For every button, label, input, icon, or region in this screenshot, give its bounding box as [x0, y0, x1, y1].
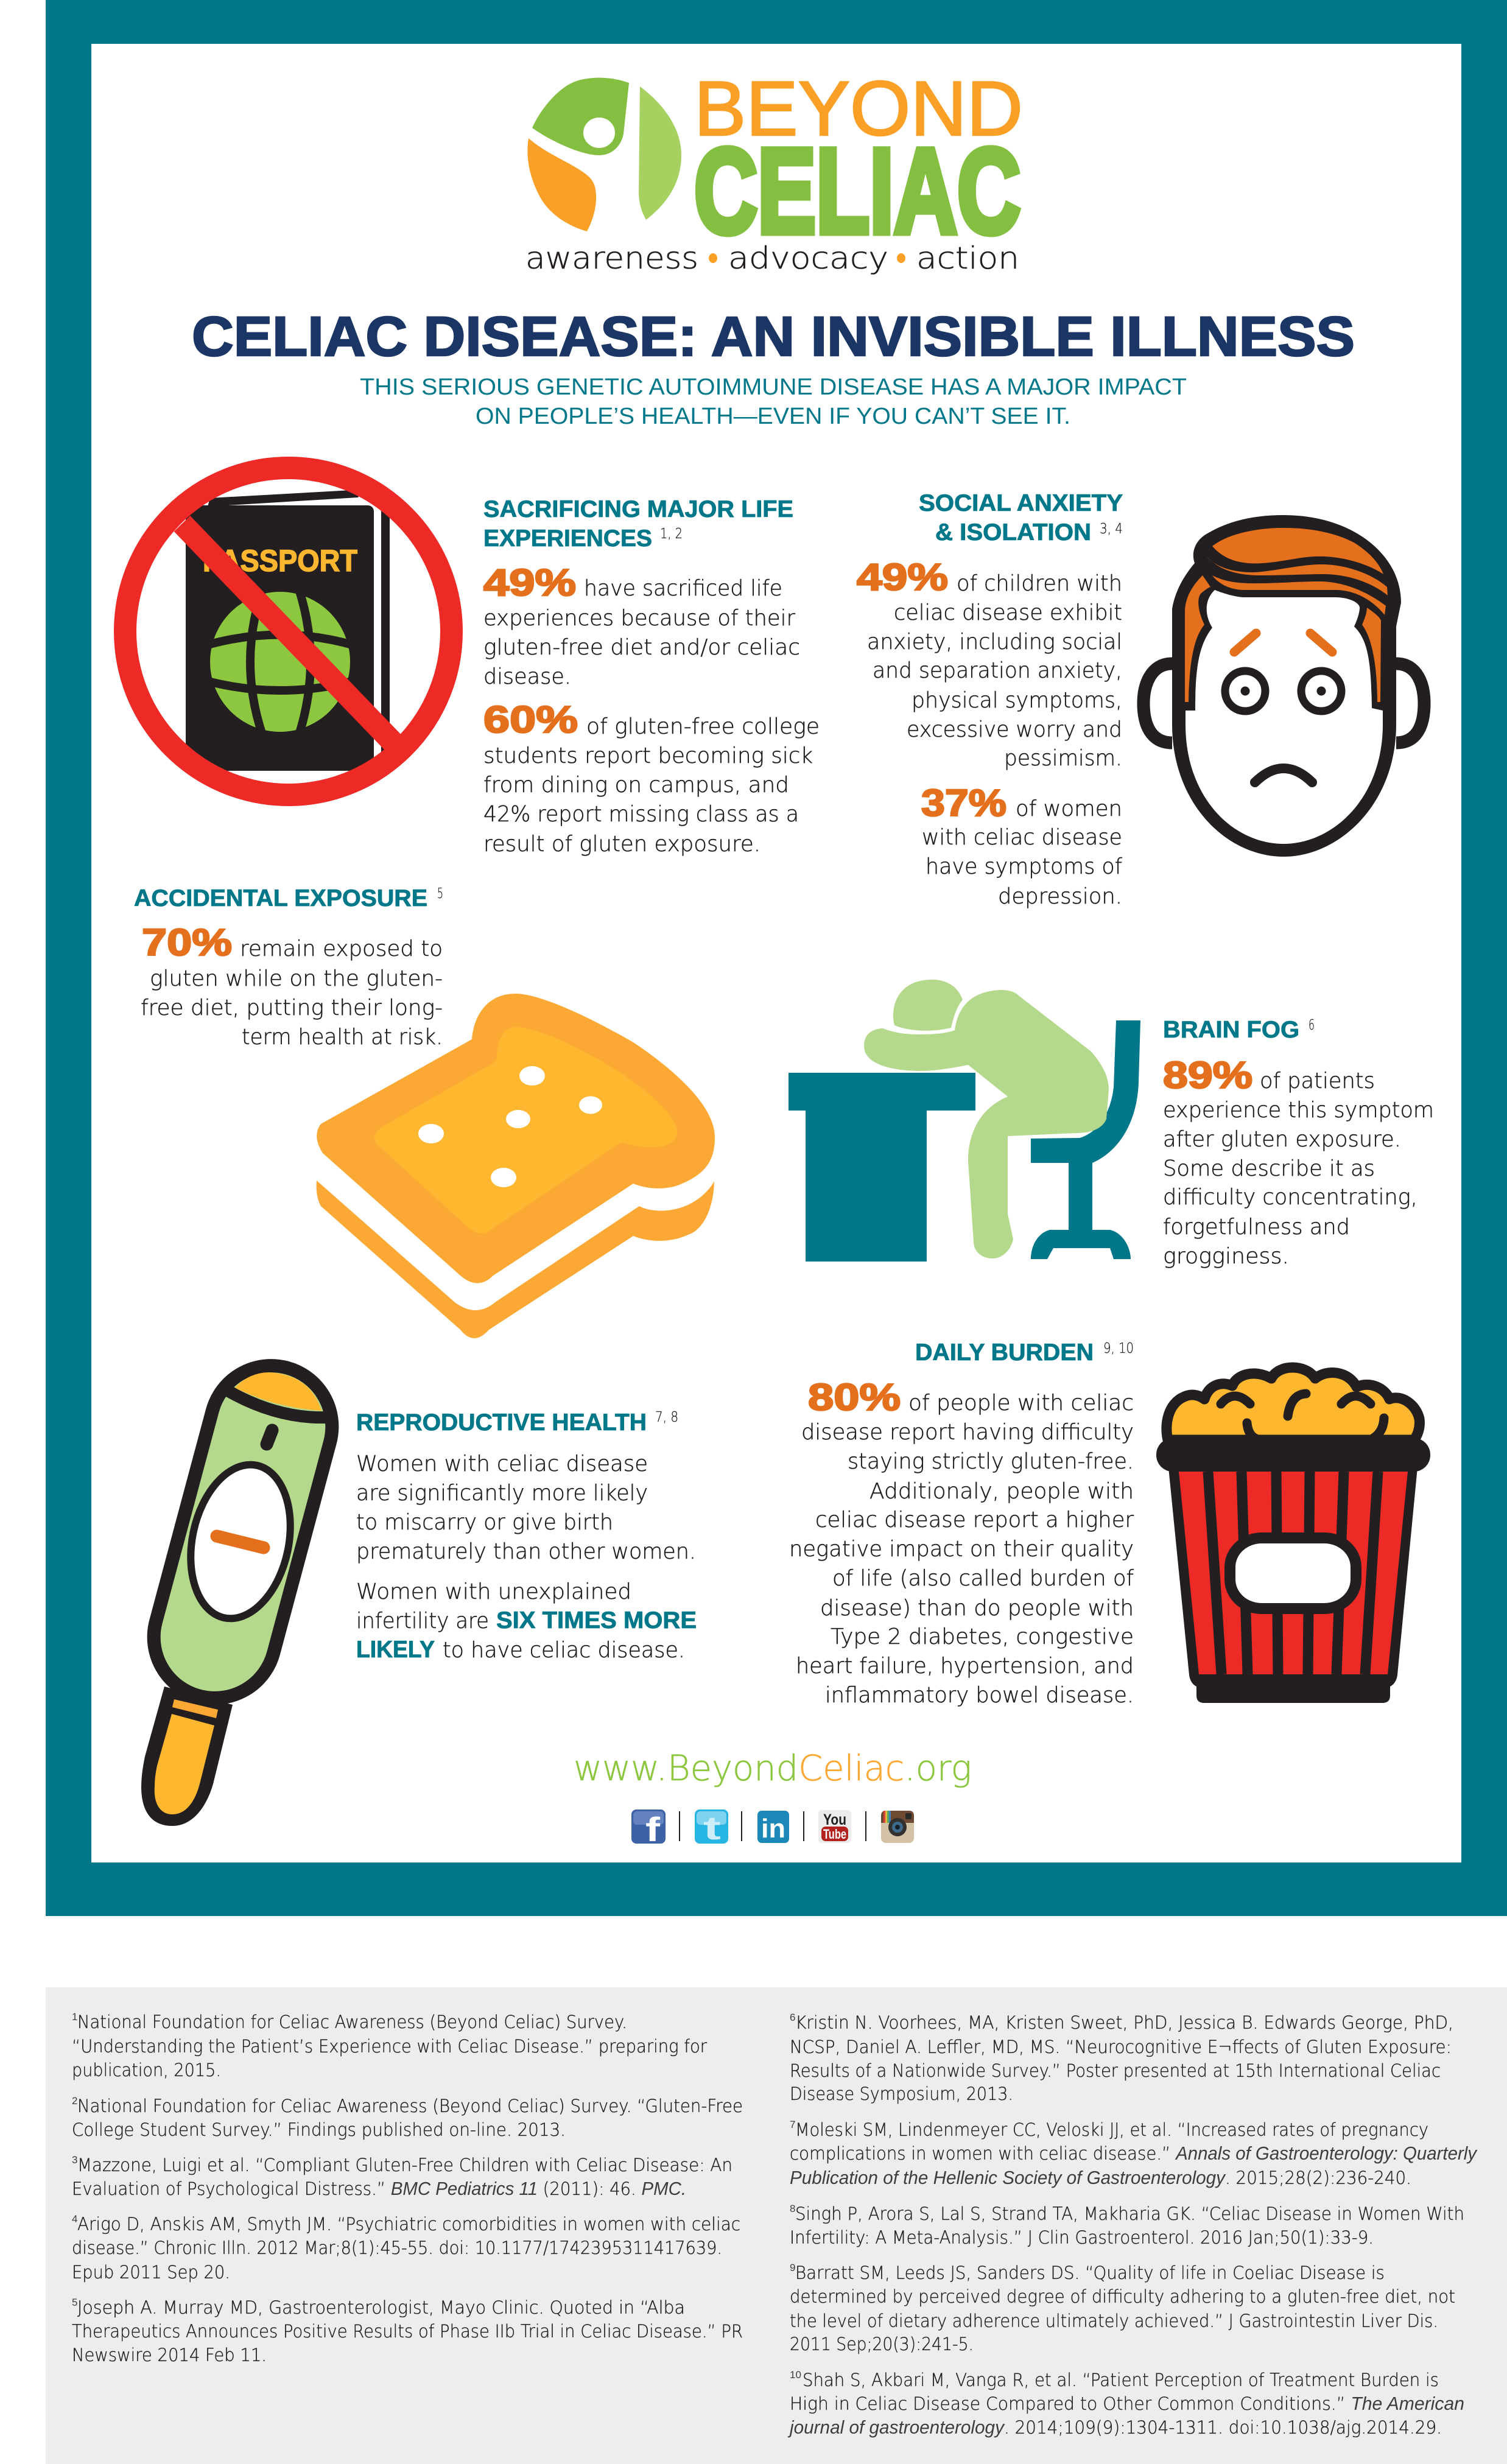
top cap — [235, 1372, 321, 1411]
heading: REPRODUCTIVE HEALTH — [356, 1409, 647, 1436]
stat: 37 percent of women: 37% — [921, 782, 1006, 824]
references right column — [787, 2012, 1478, 2438]
heading — [483, 496, 793, 552]
references right column: 8 — [790, 2203, 795, 2214]
stat: 80 percent: of people with celiac — [908, 1391, 1134, 1416]
logo wordmark — [694, 65, 1023, 258]
stat: 80 percent: staying strictly gluten-free. — [848, 1449, 1134, 1474]
references right column: determined by perceived degree of difficulty adhering to a gluten-free diet, not — [790, 2286, 1455, 2307]
stat: 60 percent: of gluten-free college — [586, 714, 820, 739]
references right column: 6 — [790, 2012, 795, 2023]
icon: youtube — [818, 1810, 851, 1843]
references left column: Therapeutics Announces Positive Results of Phase IIb Trial in Celiac Disease.” PR — [72, 2321, 743, 2342]
stat: 89 percent: forgetfulness and — [1163, 1215, 1350, 1240]
stat: 80 percent: negative impact on their quality — [789, 1537, 1134, 1562]
stat: 70 percent: remain exposed to — [240, 936, 443, 961]
references left column: 2 — [72, 2095, 77, 2107]
stat: 89 percent: Some describe it as — [1163, 1156, 1375, 1181]
references left column: disease.” Chronic Illn. 2012 Mar;8(1):45-55. doi: 10.1177/1742395311417639. — [72, 2238, 722, 2258]
popcorn — [1167, 1367, 1419, 1440]
panel: references — [46, 1987, 1507, 2464]
references left column: Joseph A. Murray MD, Gastroenterologist, Mayo Clinic. Quoted in “Alba — [77, 2297, 685, 2318]
text block: to miscarry or give birth — [356, 1510, 613, 1535]
stat: 60 percent: from dining on campus, and — [483, 773, 789, 798]
heading: SOCIAL ANXIETY — [919, 490, 1123, 516]
references right column: High in Celiac Disease Compared to Other Common Conditions.” The American — [790, 2393, 1464, 2414]
references left column: Newswire 2014 Feb 11. — [72, 2345, 267, 2365]
stat: 37 percent of women: depression. — [998, 884, 1122, 909]
stat: 49 percent: experiences because of their — [483, 606, 795, 631]
text block: six times more likely — [356, 1579, 697, 1663]
heading — [919, 490, 1123, 546]
references right column: Publication of the Hellenic Society of Gastroenterology. 2015;28(2):236-240. — [790, 2167, 1411, 2188]
references right column: the level of dietary adherence ultimately achieved.” J Gastrointestin Liver Dis. — [790, 2311, 1438, 2331]
text block — [356, 1451, 696, 1564]
stat: 80 percent: Type 2 diabetes, congestive — [831, 1624, 1134, 1649]
desk — [789, 1073, 975, 1262]
icon: linkedin — [757, 1811, 789, 1844]
text block: six times more likely: LIKELY — [356, 1637, 435, 1663]
heading: 6 — [1309, 1017, 1315, 1033]
text block: are significantly more likely — [356, 1481, 648, 1506]
panel: daily burden — [789, 1339, 1134, 1708]
stat: 49 percent — [483, 562, 800, 689]
references right column: Disease Symposium, 2013. — [790, 2083, 1013, 2104]
icon: youtube: Tube — [823, 1827, 846, 1842]
icon: slice of bread — [317, 994, 715, 1338]
stat: 60 percent: 42% report missing class as a — [483, 802, 799, 827]
stat: 49 percent of children: celiac disease exhibit — [894, 600, 1122, 625]
icon: person slumped on desk — [789, 980, 1140, 1262]
references right column: 9 — [790, 2262, 795, 2273]
website url: www.BeyondCeliac.org — [574, 1747, 972, 1789]
stat: 89 percent — [1163, 1055, 1434, 1269]
logo tagline: advocacy — [728, 240, 888, 276]
icon: facebook — [631, 1809, 666, 1848]
text block: six times more likely: Women with unexplained — [356, 1579, 631, 1604]
bucket — [1168, 1467, 1417, 1703]
icon: facebook: f — [645, 1810, 660, 1848]
stat: 49 percent: 49% — [483, 562, 576, 604]
social media icons — [631, 1809, 914, 1848]
stat: 37 percent of women — [921, 782, 1122, 909]
person — [864, 980, 1109, 1258]
references left column: 5 — [72, 2297, 77, 2308]
heading: DAILY BURDEN — [915, 1339, 1094, 1366]
icon: linkedin: in — [761, 1814, 785, 1844]
icon: popcorn bucket — [1156, 1367, 1430, 1703]
stat: 70 percent: term health at risk. — [242, 1025, 443, 1050]
stat: 80 percent: inflammatory bowel disease. — [825, 1683, 1134, 1708]
references right column: 2011 Sep;20(3):241-5. — [790, 2334, 974, 2354]
stat: 89 percent: grogginess. — [1163, 1244, 1289, 1269]
stat: 89 percent: 89% — [1163, 1055, 1252, 1097]
stat: 70 percent: gluten while on the gluten- — [150, 966, 443, 991]
text block: six times more likely: SIX TIMES MORE — [496, 1607, 697, 1634]
references left column: National Foundation for Celiac Awareness (Beyond Celiac) Survey. “Gluten-Free — [77, 2096, 743, 2116]
chair — [1031, 1020, 1140, 1259]
stat: 37 percent of women: of women — [1016, 796, 1122, 821]
stat: 60 percent: students report becoming sick — [483, 743, 813, 768]
stat: 37 percent of women: have symptoms of — [926, 854, 1122, 879]
stat: 49 percent of children: pessimism. — [1004, 746, 1122, 771]
logo tagline: awareness — [525, 240, 698, 276]
references left column: “Understanding the Patient’s Experience with Celiac Disease.” preparing for — [72, 2036, 707, 2057]
references left column: Mazzone, Luigi et al. “Compliant Gluten-Free Children with Celiac Disease: An — [77, 2155, 732, 2175]
references right column: journal of gastroenterology. 2014;109(9):1304-1311. doi:10.1038/ajg.2014.29. — [787, 2417, 1442, 2438]
text block: six times more likely: infertility are — [356, 1609, 489, 1634]
panel: sacrificing major life experiences — [483, 496, 820, 857]
stat: 80 percent: 80% — [808, 1377, 901, 1419]
handle — [141, 1687, 233, 1826]
stat: 37 percent of women: with celiac disease — [922, 825, 1122, 850]
heading: SACRIFICING MAJOR LIFE — [483, 496, 793, 522]
stat: 49 percent of children: physical symptoms, — [912, 688, 1122, 713]
icon: instagram — [881, 1811, 914, 1843]
heading: & ISOLATION — [935, 519, 1091, 546]
icon: twitter — [695, 1809, 728, 1847]
stat: 70 percent: free diet, putting their long- — [141, 995, 443, 1020]
stat: 70 percent: 70% — [142, 922, 232, 964]
icon: passport with prohibition sign — [125, 468, 452, 795]
logo wordmark: CELIAC — [694, 124, 1020, 258]
panel: accidental exposure — [134, 885, 443, 1050]
body — [140, 1352, 346, 1711]
references right column: Barratt SM, Leeds JS, Sanders DS. “Quality of life in Coeliac Disease is — [795, 2262, 1385, 2283]
references left column: 4 — [72, 2213, 77, 2225]
stat: 49 percent of children: 49% — [857, 556, 948, 598]
icon: worried face — [1143, 515, 1424, 857]
logo tagline — [525, 240, 1019, 276]
stat: 49 percent of children: of children with — [957, 571, 1122, 596]
stat: 49 percent: gluten-free diet and/or celiac — [483, 635, 800, 660]
text block: prematurely than other women. — [356, 1539, 696, 1564]
subtitle: ON PEOPLE’S HEALTH—EVEN IF YOU CAN’T SEE IT. — [476, 404, 1070, 429]
references right column: 7 — [790, 2119, 795, 2130]
stat: 89 percent: after gluten exposure. — [1163, 1127, 1401, 1152]
heading: 3, 4 — [1100, 521, 1123, 537]
panel: reproductive health — [356, 1409, 697, 1663]
stat: 89 percent: of patients — [1260, 1069, 1375, 1093]
heading: EXPERIENCES — [483, 525, 652, 552]
icon: logo leaves — [527, 78, 681, 231]
stat: 80 percent: Additionaly, people with — [869, 1479, 1134, 1504]
stat: 49 percent: disease. — [483, 664, 571, 689]
heading: 9, 10 — [1103, 1341, 1134, 1357]
heading: ACCIDENTAL EXPOSURE — [134, 885, 427, 911]
references left column: Evaluation of Psychological Distress.” BMC Pediatrics 11 (2011): 46. PMC. — [72, 2178, 686, 2199]
references left column: 3 — [72, 2154, 77, 2166]
stat: 80 percent — [789, 1377, 1134, 1708]
references right column: Moleski SM, Lindenmeyer CC, Veloski JJ, et al. “Increased rates of pregnancy — [795, 2119, 1428, 2140]
stat: 89 percent: experience this symptom — [1163, 1098, 1434, 1123]
title: CELIAC DISEASE: AN INVISIBLE ILLNESS — [192, 306, 1355, 368]
stat: 49 percent of children — [857, 556, 1122, 771]
heading: 1, 2 — [660, 526, 683, 542]
references left column: College Student Survey.” Findings published on-line. 2013. — [72, 2119, 566, 2140]
stat: 80 percent: celiac disease report a higher — [815, 1508, 1134, 1532]
references right column: Shah S, Akbari M, Vanga R, et al. “Patient Perception of Treatment Burden is — [803, 2370, 1439, 2390]
logo: Beyond Celiac — [525, 65, 1023, 276]
icon: passport with prohibition sign: PASSPORT — [203, 544, 357, 578]
text block: Women with celiac disease — [356, 1451, 648, 1476]
result window — [177, 1455, 304, 1628]
references right column: 10 — [790, 2369, 801, 2381]
references left column: publication, 2015. — [72, 2060, 221, 2080]
references left column — [72, 2011, 743, 2365]
stat: 80 percent: disease report having difficulty — [801, 1420, 1134, 1445]
subtitle: THIS SERIOUS GENETIC AUTOIMMUNE DISEASE HAS A MAJOR IMPACT — [360, 374, 1187, 400]
stat: 60 percent: 60% — [483, 699, 578, 741]
references right column: NCSP, Daniel A. Leffler, MD, MS. “Neurocognitive E¬ffects of Gluten Exposure: — [790, 2037, 1452, 2057]
stat: 49 percent of children: anxiety, including social — [867, 630, 1122, 655]
stat: 49 percent of children: and separation anxiety, — [873, 658, 1122, 683]
panel: brain fog — [1163, 1017, 1434, 1269]
text block: six times more likely: to have celiac disease. — [443, 1638, 685, 1663]
subtitle — [360, 374, 1187, 429]
references left column: Epub 2011 Sep 20. — [72, 2262, 230, 2283]
teal frame and white main panel — [46, 0, 1507, 1916]
stat: 49 percent of children: excessive worry and — [907, 717, 1122, 742]
stat: 80 percent: disease) than do people with — [820, 1596, 1134, 1621]
heading: BRAIN FOG — [1163, 1017, 1299, 1043]
logo wordmark: BEYOND — [694, 65, 1023, 152]
stat: 60 percent — [483, 699, 820, 857]
stat: 80 percent: of life (also called burden of — [832, 1566, 1134, 1591]
stat: 80 percent: heart failure, hypertension, and — [796, 1654, 1134, 1679]
references left column: National Foundation for Celiac Awareness (Beyond Celiac) Survey. — [77, 2012, 627, 2032]
icon: pregnancy test stick — [140, 1352, 346, 1826]
stat: 70 percent — [141, 922, 443, 1050]
stat: 60 percent: result of gluten exposure. — [483, 832, 761, 857]
references right column: complications in women with celiac disease.” Annals of Gastroenterology: Quarterly — [790, 2143, 1478, 2164]
references left column: Arigo D, Anskis AM, Smyth JM. “Psychiatric comorbidities in women with celiac — [77, 2214, 740, 2234]
icon: twitter: t — [703, 1810, 721, 1847]
heading: 5 — [437, 886, 443, 902]
references right column: Singh P, Arora S, Lal S, Strand TA, Makharia GK. “Celiac Disease in Women With — [795, 2203, 1464, 2224]
references right column: Kristin N. Voorhees, MA, Kristen Sweet, PhD, Jessica B. Edwards George, PhD, — [795, 2012, 1453, 2033]
stat: 49 percent: have sacrificed life — [584, 576, 782, 601]
panel: social anxiety and isolation — [857, 490, 1123, 909]
heading: 7, 8 — [655, 1409, 678, 1425]
references left column: 1 — [72, 2011, 77, 2023]
icon: youtube: You — [823, 1811, 846, 1828]
references right column: Results of a Nationwide Survey.” Poster presented at 15th International Celiac — [790, 2060, 1441, 2081]
stat: 89 percent: difficulty concentrating, — [1163, 1185, 1417, 1210]
logo tagline: action — [916, 240, 1019, 276]
references right column: Infertility: A Meta-Analysis.” J Clin Gastroenterol. 2016 Jan;50(1):33-9. — [790, 2227, 1374, 2248]
